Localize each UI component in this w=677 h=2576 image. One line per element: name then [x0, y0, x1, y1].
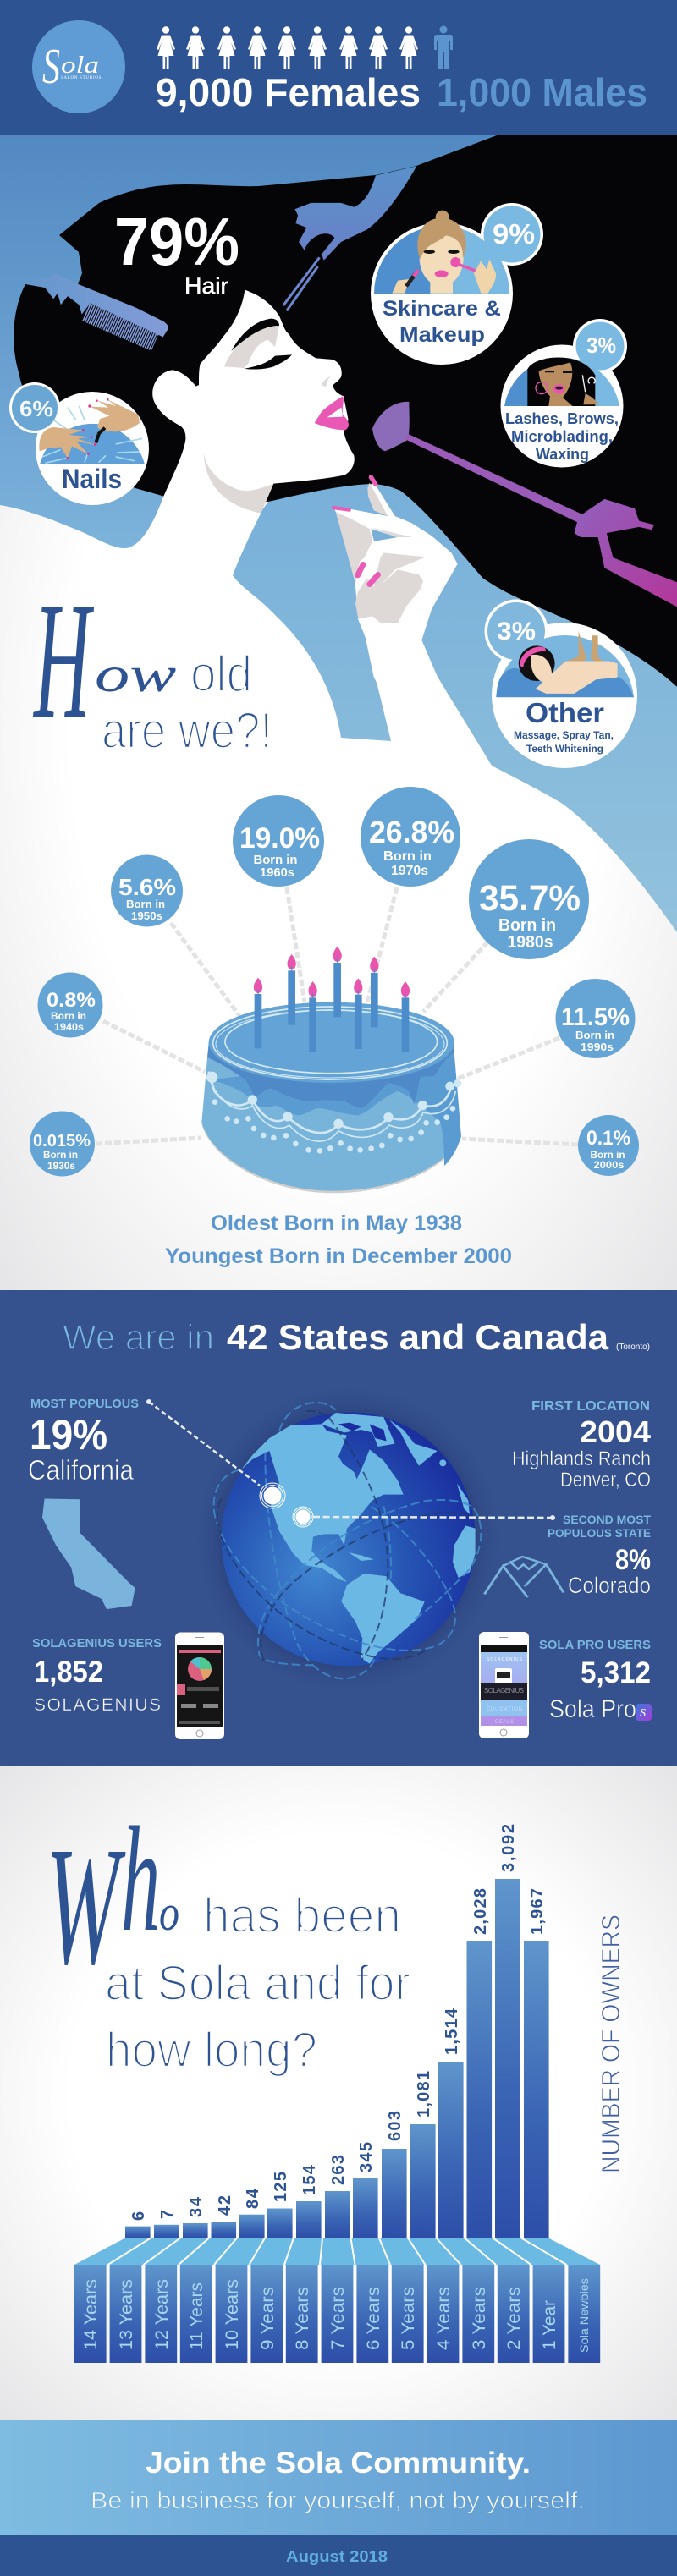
heading: who has been at Sola and for how long: W [46, 1813, 126, 2000]
bar values: 1,967 [528, 1888, 547, 1935]
heading: how old are we: H [33, 569, 95, 754]
stat: most populous California: MOST POPULOUS [30, 1397, 139, 1411]
bar values: 125 [272, 2172, 290, 2202]
phone: solagenius app [175, 1633, 224, 1739]
heading: we are in 42 states and Canada [63, 1317, 650, 1357]
bars [125, 1879, 549, 2238]
balloon: 5.6% 1950s: 1950s [131, 909, 162, 922]
label: other: Other [526, 697, 604, 728]
callout: other 3% [484, 599, 637, 768]
balloon: 11.5% 1990s: 11.5% [561, 1003, 630, 1031]
heading: we are in 42 states and Canada: 42 States and Canada [227, 1317, 609, 1357]
label: lashes brows: Lashes, Brows, [505, 410, 619, 427]
bar values: 2,028 [471, 1888, 490, 1935]
bar values: 154 [300, 2164, 319, 2195]
callout: skincare and makeup 9% [371, 203, 543, 365]
icons: nine females [157, 26, 418, 69]
bar values: 42 [216, 2195, 234, 2216]
footer [0, 2535, 677, 2576]
phone: sola pro app: SOLAGENIUS [484, 1687, 524, 1694]
heading: females count: 9,000 Females [156, 70, 421, 114]
callout: lashes brows 3% [501, 319, 627, 467]
heading: how old are we: old [190, 645, 252, 702]
stat: sola pro users: Sola Pro [549, 1695, 636, 1723]
balloon: 35.7% 1980s: 1980s [508, 933, 553, 952]
balloon: 19.0% 1960s: Born in [254, 853, 298, 867]
icon: comb [25, 273, 168, 342]
balloon: 11.5% 1990s [555, 979, 635, 1058]
balloon: 0.1% 2000s: Born in [591, 1149, 625, 1161]
stat: first location: Highlands Ranch [512, 1447, 651, 1470]
heading: how old are we: ow [95, 646, 176, 702]
tenure labels: 12 Years [152, 2279, 172, 2350]
balloon: 35.7% 1980s [469, 839, 589, 959]
icon: mountains [484, 1557, 564, 1597]
bar values: 3,092 [499, 1824, 518, 1872]
callout: skincare and makeup 9%: Makeup [399, 323, 485, 347]
blue shoulder and hair wave [233, 484, 677, 932]
logo: Sola Salon Studios: SALON STUDIOS [61, 76, 102, 80]
stat: solagenius users: SOLAGENIUS [34, 1695, 161, 1715]
black hair [14, 135, 677, 687]
bar values: 6 [129, 2211, 148, 2221]
bar values: 84 [244, 2188, 262, 2209]
stat: second most populous Colorado [548, 1513, 651, 1598]
logo: Sola Salon Studios: ola [61, 52, 99, 79]
panel: hero illustration [0, 135, 677, 932]
logo: Sola Salon Studios [32, 20, 125, 113]
heading: who has been at Sola and for how long: at Sola and for [105, 1956, 410, 2011]
stat: first location [512, 1399, 651, 1491]
stat: solagenius users: SOLAGENIUS USERS [32, 1636, 162, 1651]
bar values: 345 [357, 2142, 376, 2172]
tenure labels [81, 2278, 591, 2353]
icon: hands painting nails [39, 398, 142, 463]
heading: who has been at Sola and for how long: how long? [106, 2023, 317, 2078]
tenure labels: 2 Years [504, 2287, 524, 2350]
tenure labels: 4 Years [434, 2287, 454, 2350]
stat: sola pro users: SOLA PRO USERS [539, 1638, 651, 1652]
percent: 9: 9% [493, 218, 535, 250]
panel: services and age section background [0, 135, 677, 1290]
axis label: NUMBER OF OWNERS [596, 1914, 625, 2173]
map: California [42, 1499, 135, 1609]
callout: lashes brows 3%: Microblading, [511, 428, 613, 445]
stat: most populous California [28, 1397, 139, 1486]
chart: birth decade connectors [96, 887, 578, 1145]
balloon: 5.6% 1950s: Born in [126, 898, 165, 910]
percent: 3: 3% [497, 618, 536, 645]
balloon: 11.5% 1990s: Born in [575, 1029, 614, 1041]
balloon: 26.8% 1970s: 26.8% [369, 815, 454, 849]
heading: who has been at Sola and for how long: has been [203, 1888, 401, 1943]
balloon: 5.6% 1950s: 5.6% [118, 874, 176, 900]
chart platform [74, 2238, 600, 2265]
left blue background [0, 135, 677, 548]
icon: one male [434, 25, 453, 69]
phone: sola pro app: EDUCATION [487, 1707, 522, 1712]
balloon: 26.8% 1970s: Born in [383, 849, 432, 864]
balloon: 0.1% 2000s: 0.1% [586, 1127, 630, 1150]
balloon: 19.0% 1960s: 19.0% [239, 822, 320, 854]
balloon: 0.1% 2000s [578, 1115, 639, 1176]
heading: how old are we: are we?! [102, 702, 272, 759]
tenure blocks [74, 2265, 600, 2363]
balloon: 0.8% 1940s: 1940s [54, 1021, 84, 1033]
stat: second most populous Colorado: POPULOUS STATE [548, 1526, 651, 1540]
heading: we are in 42 states and Canada: (Toronto) [616, 1343, 650, 1352]
balloon: 11.5% 1990s: 1990s [581, 1041, 614, 1053]
text: oldest and youngest: Oldest Born in May 1938 [211, 1211, 462, 1235]
icon: white hand with pink nails [333, 477, 471, 755]
phone: sola pro app: DEALS [495, 1720, 514, 1725]
bar values: 263 [329, 2155, 348, 2185]
tenure labels: Sola Newbies [577, 2278, 591, 2353]
tenure labels: 13 Years [117, 2279, 136, 2350]
stat: sola pro users [539, 1638, 651, 1723]
balloon: 19.0% 1960s: 1960s [260, 865, 294, 880]
tenure labels: 14 Years [81, 2279, 101, 2350]
balloon: 0.8% 1940s [37, 973, 103, 1037]
balloon: 0.015% 1930s: Born in [43, 1149, 78, 1161]
icon: birthday cake [201, 947, 461, 1193]
panel: tenure chart section background [0, 1766, 677, 2420]
heading: who has been at Sola and for how long: h [121, 1796, 160, 1963]
stat: solagenius users: 1,852 [34, 1656, 103, 1689]
bar values: 7 [158, 2210, 177, 2219]
stat: first location: 2004 [580, 1414, 651, 1449]
icon: woman applying makeup [392, 211, 496, 294]
callout line: second most populous [313, 1515, 555, 1520]
balloon: 0.8% 1940s: 0.8% [47, 989, 96, 1012]
callout: nails 6% [9, 382, 149, 505]
text: oldest and youngest [165, 1211, 512, 1268]
icon: sola pro app [636, 1704, 652, 1721]
label: nails: Nails [62, 464, 122, 494]
balloon: 26.8% 1970s [361, 787, 460, 887]
tenure labels: 11 Years [187, 2282, 206, 2350]
tenure labels: 7 Years [328, 2287, 348, 2350]
bar values: 1,081 [415, 2071, 433, 2117]
panel: locations [0, 1290, 677, 1766]
percent: 6: 6% [19, 396, 53, 421]
balloon: 0.015% 1930s: 0.015% [33, 1132, 91, 1151]
balloon: 0.8% 1940s: Born in [51, 1010, 86, 1022]
stat: first location: Denver, CO [560, 1469, 651, 1491]
bar values: 1,514 [443, 2008, 461, 2055]
percent: 3: 3% [586, 332, 616, 358]
orbit routes [214, 1403, 481, 1678]
call to action band: Join the Sola Community. [146, 2447, 531, 2480]
icon: hand with tweezers [283, 166, 416, 310]
balloon: 35.7% 1980s: 35.7% [479, 878, 581, 919]
icon: purple fan brush and hand [372, 402, 677, 607]
stat: second most populous Colorado: 8% [615, 1544, 651, 1576]
stat: sola pro users: 5,312 [581, 1656, 651, 1689]
stat: first location: FIRST LOCATION [531, 1399, 650, 1414]
call to action band: Be in business for yourself, not by yourself. [91, 2487, 585, 2513]
balloon: 35.7% 1980s: Born in [498, 916, 556, 935]
tenure labels: 6 Years [364, 2287, 383, 2350]
globe map [190, 1381, 506, 1697]
bar values: 603 [386, 2111, 405, 2141]
balloon: 0.015% 1930s [30, 1112, 95, 1176]
stat: 79% hair: Hair [184, 273, 228, 299]
face profile [107, 290, 355, 575]
bar chart: number of owners [74, 1824, 625, 2363]
footer: August 2018 [286, 2548, 388, 2565]
tenure labels: 10 Years [223, 2279, 242, 2350]
logo: Sola Salon Studios: S [42, 39, 60, 95]
call to action band [0, 2420, 677, 2535]
balloon: 0.1% 2000s: 2000s [594, 1159, 625, 1171]
icon: sola pro app: S [640, 1707, 646, 1720]
stat: most populous California: California [28, 1454, 135, 1486]
tenure labels: 5 Years [399, 2287, 418, 2350]
pin: California [260, 1483, 285, 1508]
stat: second most populous Colorado: Colorado [568, 1573, 651, 1598]
stat: second most populous Colorado: SECOND MOST [563, 1513, 651, 1526]
stat: most populous California: 19% [30, 1411, 107, 1458]
tenure labels: 3 Years [470, 2287, 489, 2350]
callout: other 3%: Teeth Whitening [526, 743, 603, 755]
balloon: 0.015% 1930s: 1930s [47, 1160, 75, 1172]
bar values: 34 [187, 2196, 206, 2217]
heading: who has been at Sola and for how long [46, 1796, 410, 2078]
text: oldest and youngest: Youngest Born in December 2000 [165, 1244, 512, 1268]
balloon: 26.8% 1970s: 1970s [391, 864, 428, 878]
tenure labels: 8 Years [293, 2287, 312, 2350]
callout line: most populous [146, 1399, 260, 1486]
heading: we are in 42 states and Canada: We are in [63, 1317, 214, 1357]
callout: other 3%: Massage, Spray Tan, [514, 729, 614, 741]
callout: lashes brows 3%: Waxing [536, 446, 589, 463]
heading: males count: 1,000 Males [437, 70, 647, 114]
balloon: 5.6% 1950s [111, 854, 183, 927]
tenure labels: 1 Year [540, 2300, 559, 2350]
icon: massage [497, 631, 634, 697]
tenure labels: 9 Years [258, 2287, 278, 2350]
header band [0, 0, 677, 135]
heading: who has been at Sola and for how long: o [159, 1885, 179, 1941]
label: skincare and makeup: Skincare & [383, 297, 501, 321]
balloon: 19.0% 1960s [233, 795, 324, 887]
stat: 79% hair: 79% [114, 204, 239, 279]
heading: how old are we [33, 569, 272, 759]
phone: sola pro app: SOLAGENIUS [487, 1657, 523, 1662]
pin: Colorado [293, 1507, 313, 1527]
bar values [129, 1824, 547, 2221]
phone: sola pro app [479, 1632, 529, 1738]
land masses [241, 1413, 476, 1664]
icon: woman curling lashes [527, 357, 599, 406]
stat: solagenius users [32, 1636, 162, 1715]
